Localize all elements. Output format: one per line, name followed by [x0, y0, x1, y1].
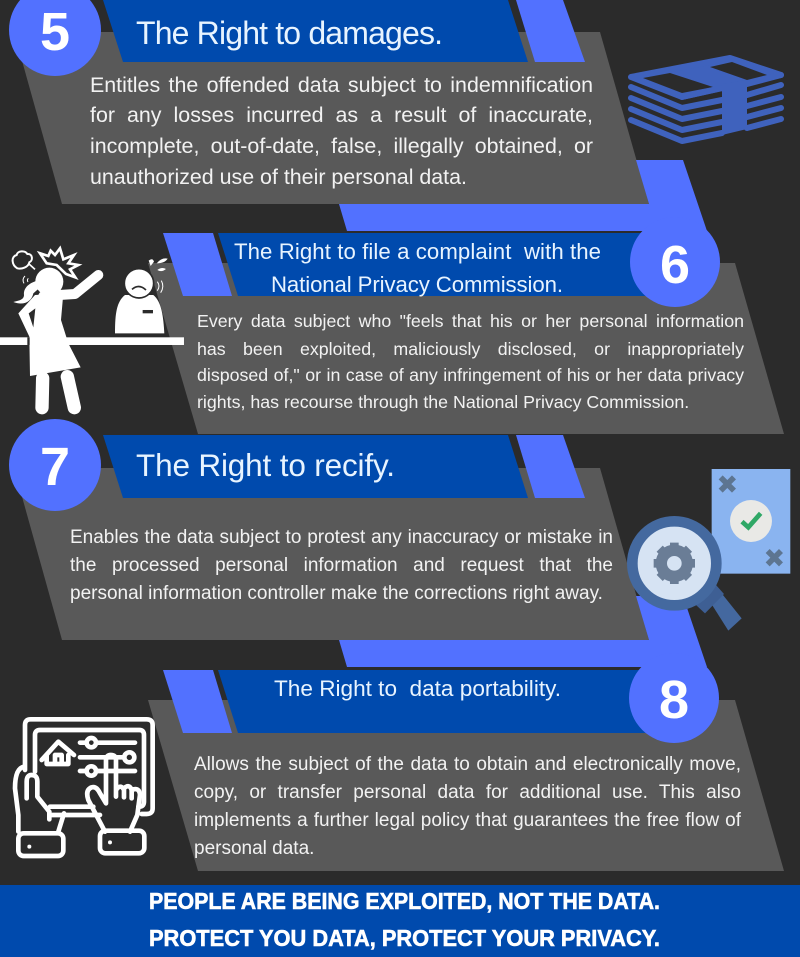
right 5 description — [90, 70, 593, 195]
right 6 heading: The Right to file a complaint with the — [234, 239, 601, 264]
right 8 heading banner — [218, 670, 660, 733]
right 8 heading: The Right to data portability. — [274, 676, 561, 701]
right 6 description: disposed of," or in case of any infringement of his or her data privacy — [197, 365, 744, 385]
right 8 accent strip — [163, 670, 232, 733]
footer message: PEOPLE ARE BEING EXPLOITED, NOT THE DATA. — [149, 888, 660, 914]
right 6 heading: National Privacy Commission. — [271, 272, 563, 297]
panel: right 5 damages — [9, 0, 649, 204]
right 5 heading banner — [103, 0, 528, 62]
right 8 number badge: 8 — [659, 670, 689, 730]
right 5 accent strip — [516, 0, 585, 62]
right 7 heading: The Right to recify. — [136, 447, 395, 483]
right 8 description: copy, or transfer personal data for additional use. This also — [194, 782, 741, 803]
right 8 description — [194, 750, 741, 865]
right 6 heading banner — [218, 233, 660, 296]
right 7 number badge: 7 — [40, 437, 70, 497]
right 7 description: personal information controller make the corrections right away. — [70, 583, 603, 604]
right 8 number badge — [629, 653, 719, 743]
right 5 description: unauthorized use of their personal data. — [90, 165, 467, 189]
right 8 description: personal data. — [194, 838, 314, 859]
right 6 number badge: 6 — [660, 235, 690, 295]
right 6 description: has been exploited, maliciously disclosed, or inappropriately — [197, 339, 744, 359]
panel: right 6 complaint — [148, 217, 784, 434]
right 7 body panel — [14, 468, 649, 640]
right 7 description: Enables the data subject to protest any inaccuracy or mistake in — [70, 527, 613, 548]
arrow: connector from 5 to 6 — [339, 160, 707, 231]
right 6 description: rights, has recourse through the National Privacy Commission. — [197, 392, 689, 412]
arrow: connector from 7 to 8 — [339, 596, 707, 667]
right 8 description: implements a further legal policy that guarantees the free flow of — [194, 810, 741, 831]
panel: right 8 data portability — [148, 653, 784, 871]
right 5 description: incomplete, out-of-date, false, illegally obtained, or — [90, 134, 593, 158]
right 7 accent strip — [516, 435, 585, 498]
footer message — [149, 888, 660, 951]
right 6 description — [197, 306, 744, 421]
icon: angry customer at a counter — [0, 248, 184, 408]
right 6 accent strip — [163, 233, 232, 296]
footer message: PROTECT YOU DATA, PROTECT YOUR PRIVACY. — [149, 925, 660, 951]
right 5 description: for any losses incurred as a result of inaccurate, — [90, 103, 593, 127]
right 7 description — [70, 523, 613, 613]
right 7 heading banner — [103, 435, 528, 498]
right 5 number badge — [9, 0, 101, 76]
icon: magnifier over checked document — [632, 469, 790, 631]
right 6 description: Every data subject who "feels that his or her personal information — [197, 311, 744, 331]
right 5 body panel — [14, 32, 649, 204]
right 7 number badge — [9, 419, 101, 511]
right 5 heading: The Right to damages. — [136, 15, 443, 51]
right 5 description: Entitles the offended data subject to indemnification — [90, 73, 593, 97]
right 7 description: the processed personal information and request that the — [70, 555, 613, 576]
right 8 description: Allows the subject of the data to obtain and electronically move, — [194, 754, 741, 775]
icon: stack of money — [631, 58, 781, 141]
panel: right 7 rectify — [9, 419, 649, 640]
right 6 number badge — [630, 217, 720, 307]
icon: hands on smart home tablet — [15, 719, 153, 856]
right 5 number badge: 5 — [40, 2, 70, 62]
footer banner — [0, 885, 800, 957]
right 6 body panel — [148, 263, 784, 434]
right 8 body panel — [148, 700, 784, 871]
right 6 heading — [234, 239, 601, 297]
